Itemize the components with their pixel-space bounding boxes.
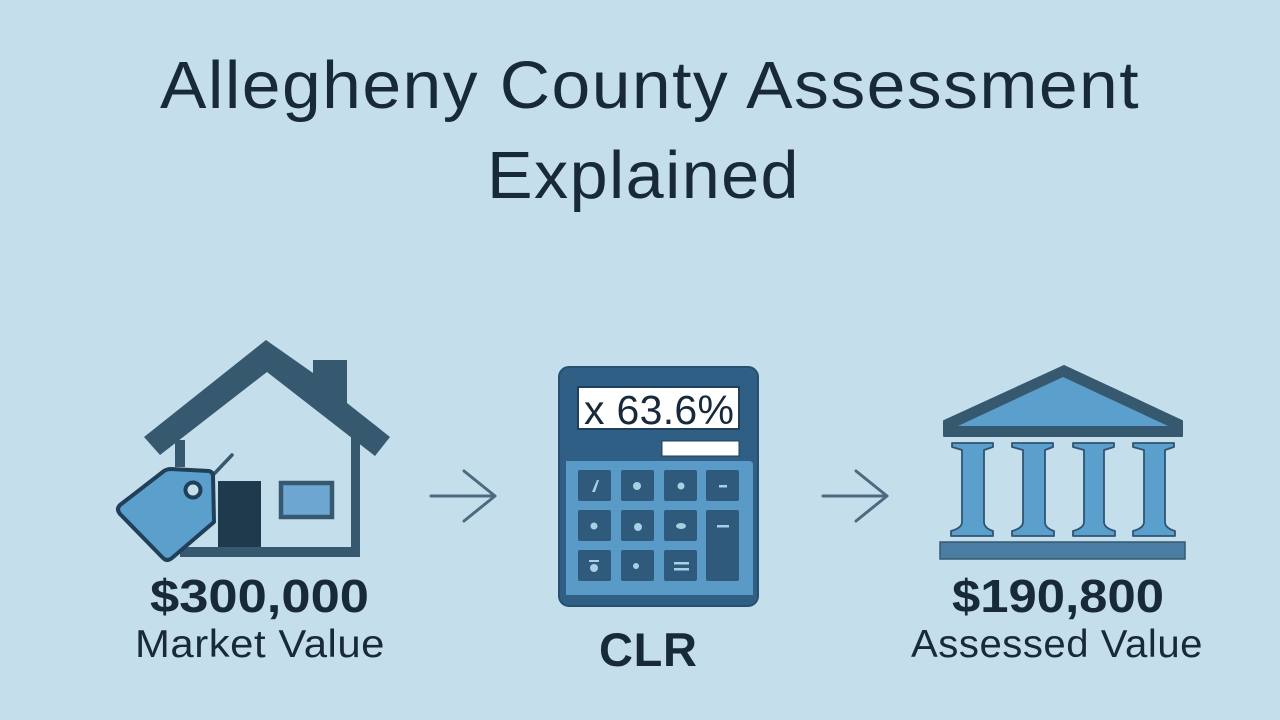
market value figure: Market Value [135, 623, 385, 666]
window [281, 483, 332, 517]
price tag [118, 469, 214, 560]
market value figure: $300,000 [150, 570, 369, 622]
keypad [566, 461, 753, 595]
base [940, 542, 1185, 559]
display: x 63.6% [584, 387, 734, 433]
key glyphs [589, 480, 729, 572]
price tag hole [186, 482, 200, 498]
columns [951, 443, 1175, 536]
arrow: market value to calculator [431, 471, 495, 521]
assessed value figure [911, 570, 1203, 666]
title: Explained [487, 138, 800, 213]
arrow: calculator to assessed value [823, 471, 887, 521]
assessed value figure: $190,800 [952, 570, 1164, 622]
pediment [944, 366, 1182, 436]
house roof and chimney [144, 340, 390, 456]
icon: calculator [559, 367, 758, 606]
icon: house with price tag [118, 340, 390, 560]
door [218, 481, 261, 547]
pediment inner [958, 377, 1168, 426]
assessed value figure: Assessed Value [911, 623, 1203, 666]
title [160, 48, 1140, 213]
icon: government building [940, 366, 1185, 559]
calculator keys [578, 470, 739, 581]
price tag string [214, 455, 232, 474]
house walls [175, 430, 360, 557]
small display bar [662, 441, 739, 456]
title: Allegheny County Assessment [160, 48, 1140, 123]
market value figure [135, 570, 385, 666]
CLR label: CLR [599, 623, 697, 676]
calculator body [559, 367, 758, 606]
